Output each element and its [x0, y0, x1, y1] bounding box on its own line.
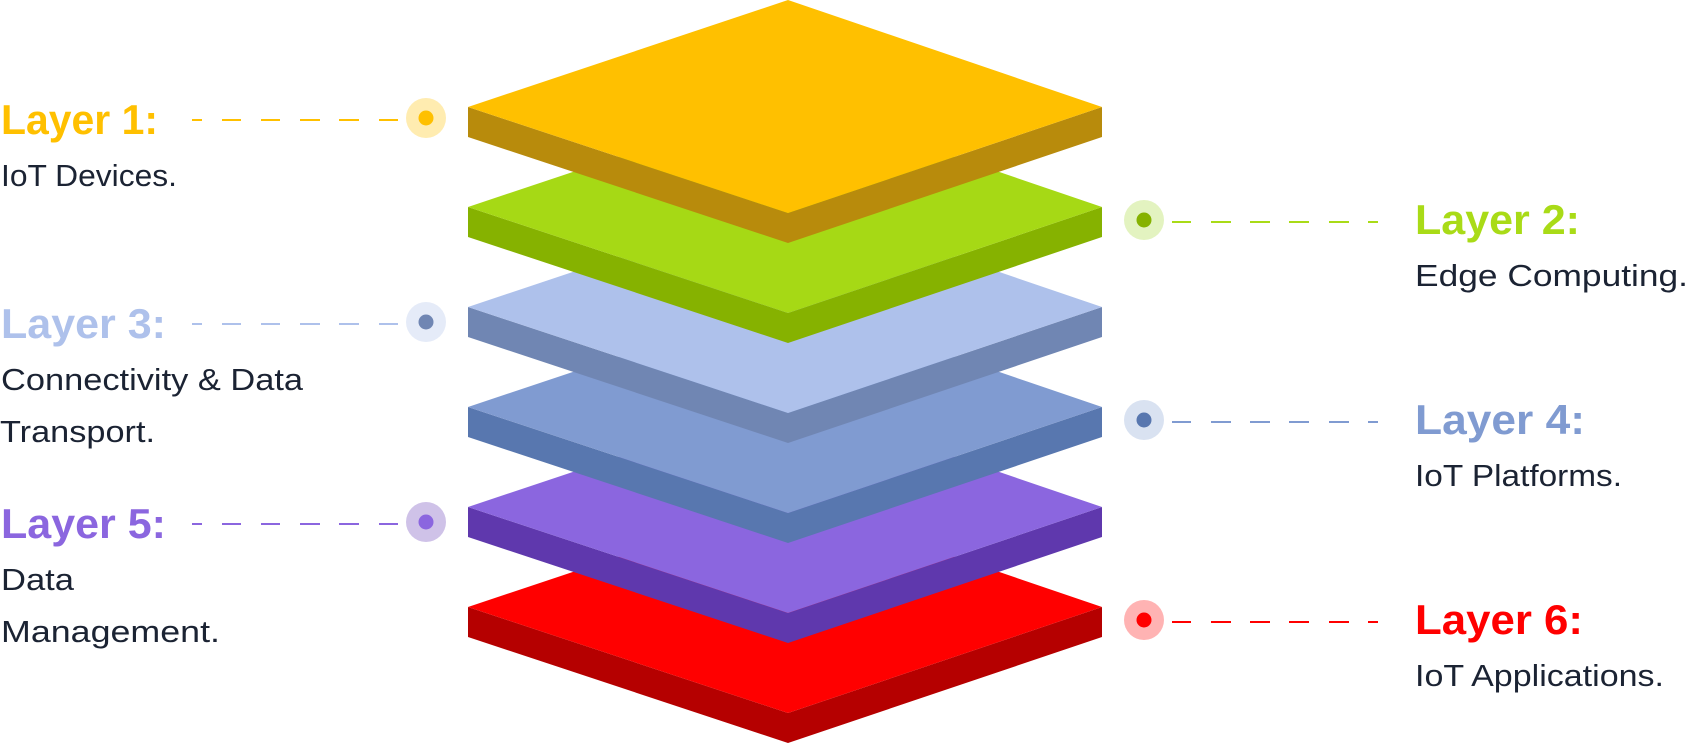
marker: layer 2 — [1124, 200, 1164, 240]
heading: layer 1: Layer 1: — [1, 96, 158, 143]
marker: layer 4 — [1124, 400, 1164, 440]
text: IoT Platforms: IoT Platforms. — [1415, 458, 1622, 493]
text: IoT Devices: IoT Devices. — [1, 158, 177, 193]
heading: layer 2: Layer 2: — [1415, 196, 1580, 243]
isometric layer stack — [468, 0, 1102, 743]
slab: layer 3 light blue — [468, 200, 1102, 443]
marker: layer 1 — [406, 98, 446, 138]
connector: layer 3 — [192, 323, 398, 325]
callout: layer 4 — [1124, 396, 1622, 493]
slab: layer 1 yellow — [468, 0, 1102, 243]
connector: layer 6 — [1172, 621, 1378, 623]
text: Data Management: Data — [1, 562, 75, 597]
slab: layer 6 red — [468, 500, 1102, 743]
text: Data Management — [1, 562, 220, 649]
text: IoT Applications: IoT Applications. — [1415, 658, 1664, 693]
heading: layer 5: Layer 5: — [1, 500, 166, 547]
slab: layer 4 blue — [468, 300, 1102, 543]
callout: layer 2 — [1124, 196, 1688, 293]
connector: layer 4 — [1172, 421, 1378, 423]
connector: layer 2 — [1172, 221, 1378, 223]
text: Edge Computing: Edge Computing. — [1415, 258, 1688, 293]
connector: layer 1 — [192, 119, 398, 121]
slab: layer 2 green — [468, 100, 1102, 343]
callout: layer 1 — [1, 96, 446, 193]
marker: layer 5 — [406, 502, 446, 542]
text: Data Management: Management. — [1, 614, 220, 649]
heading: layer 6: Layer 6: — [1415, 596, 1583, 643]
callout: layer 6 — [1124, 596, 1664, 693]
heading: layer 3: Layer 3: — [1, 300, 166, 347]
marker: layer 3 — [406, 302, 446, 342]
text: Connectivity and Data Transport — [0, 362, 304, 449]
marker: layer 6 — [1124, 600, 1164, 640]
callout: layer 5 — [1, 500, 446, 649]
connector: layer 5 — [192, 523, 398, 525]
slab: layer 5 purple — [468, 400, 1102, 643]
text: Connectivity and Data Transport: Transport. — [0, 414, 155, 449]
callout: layer 3 — [0, 300, 446, 449]
heading: layer 4: Layer 4: — [1415, 396, 1585, 443]
text: Connectivity and Data Transport: Connectivity & Data — [1, 362, 304, 397]
